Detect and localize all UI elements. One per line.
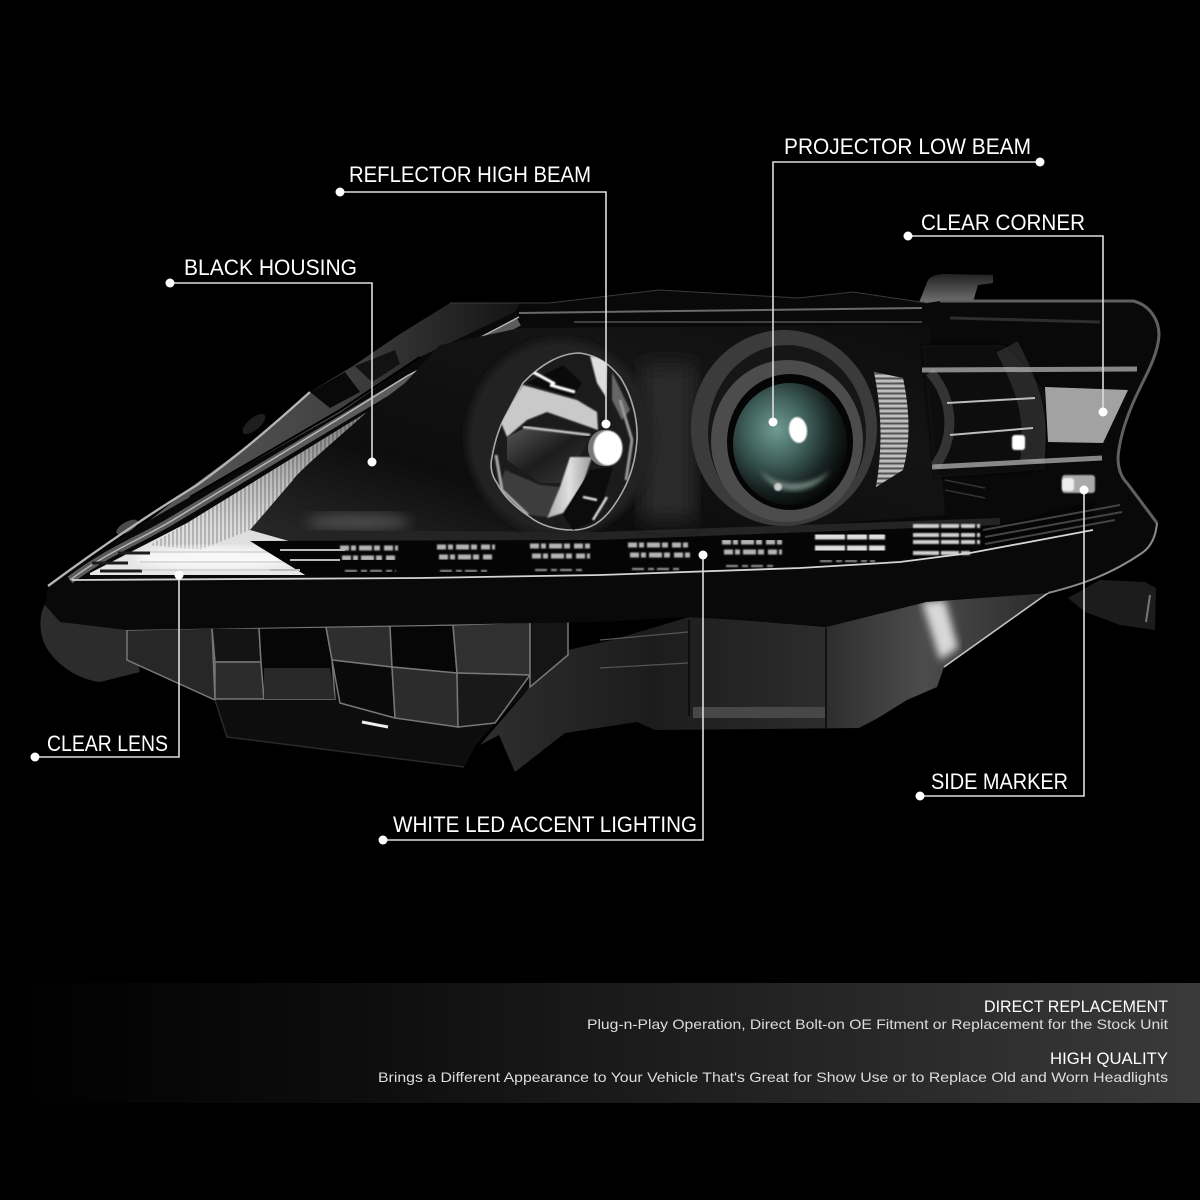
- upper left textured ridge: [114, 303, 520, 537]
- rear connector: [1068, 580, 1156, 630]
- feature: high quality: HIGH QUALITY: [1050, 1049, 1168, 1068]
- callout: clear lens: [30, 570, 184, 762]
- housing dark rear section: [922, 345, 1045, 478]
- callout: reflector high beam: REFLECTOR HIGH BEAM: [349, 162, 591, 187]
- side marker bulb: [1062, 475, 1095, 493]
- rear mounting tab: [918, 274, 993, 305]
- rear strip lines: [983, 505, 1122, 544]
- feature: high quality: [378, 1049, 1168, 1085]
- callout: clear lens: CLEAR LENS: [47, 731, 168, 756]
- black interior panel: [248, 325, 945, 541]
- lower left dark bracket: [127, 620, 568, 767]
- clear corner reflector: [1045, 387, 1128, 443]
- bulb cap: [588, 430, 620, 466]
- callout: clear corner: [904, 210, 1108, 416]
- projector lens: [727, 374, 853, 510]
- callout: projector low beam: PROJECTOR LOW BEAM: [784, 134, 1031, 159]
- callout: projector low beam: [768, 134, 1044, 426]
- headlight assembly: [40, 274, 1159, 772]
- panel lower band: [250, 518, 1000, 541]
- feature: direct replacement: DIRECT REPLACEMENT: [984, 997, 1168, 1016]
- callout: black housing: [166, 255, 376, 466]
- clear lens reflector texture: [90, 412, 367, 575]
- rear lower lines: [945, 480, 985, 498]
- white speck highlight: [1012, 435, 1025, 450]
- callout: white LED accent lighting: [378, 550, 708, 844]
- lower trim edge: [72, 530, 1093, 580]
- chrome ribbed collar: [874, 372, 908, 487]
- projector outer ring: [691, 330, 877, 526]
- housing soft highlight: [306, 513, 410, 531]
- projector inner shroud: [708, 345, 866, 521]
- lower right rim: [1048, 523, 1157, 593]
- silver lens edge bands: [48, 290, 927, 586]
- main lens shell: [45, 290, 1159, 630]
- top rim line: [950, 318, 1100, 322]
- clear corner bars: [922, 347, 1137, 467]
- body seam and lower strip: [689, 620, 826, 728]
- feature: direct replacement: Plug-n-Play Operation, Direct Bolt-on OE Fitment or Replacement for the Stock Unit: [587, 1016, 1168, 1032]
- high beam reflector: [491, 353, 637, 530]
- brightest LED bars: [815, 536, 885, 549]
- projector ring: [711, 360, 863, 522]
- callout: clear corner: CLEAR CORNER: [921, 210, 1085, 235]
- left gasket: [40, 600, 140, 682]
- callout: black housing: BLACK HOUSING: [184, 255, 357, 280]
- lower body shell: [480, 593, 1048, 772]
- callout: side marker: [916, 486, 1088, 800]
- bracket ribs: [127, 620, 568, 767]
- feature: high quality: Brings a Different Appearance to Your Vehicle That's Great for Show Use or to Replace Old and Worn Headlights: [378, 1069, 1168, 1085]
- right rim: [940, 301, 1159, 523]
- bracket small highlight: [362, 722, 388, 727]
- callout: white LED accent lighting: WHITE LED ACCENT LIGHTING: [393, 812, 697, 837]
- LED light strip: [250, 500, 1122, 578]
- feature panel: [0, 983, 1200, 1103]
- callout: side marker: SIDE MARKER: [931, 769, 1068, 794]
- callout: reflector high beam: [336, 162, 610, 428]
- reflector bezel: [467, 340, 695, 536]
- streak tails from lens: [270, 550, 345, 570]
- feature: direct replacement: [587, 997, 1168, 1032]
